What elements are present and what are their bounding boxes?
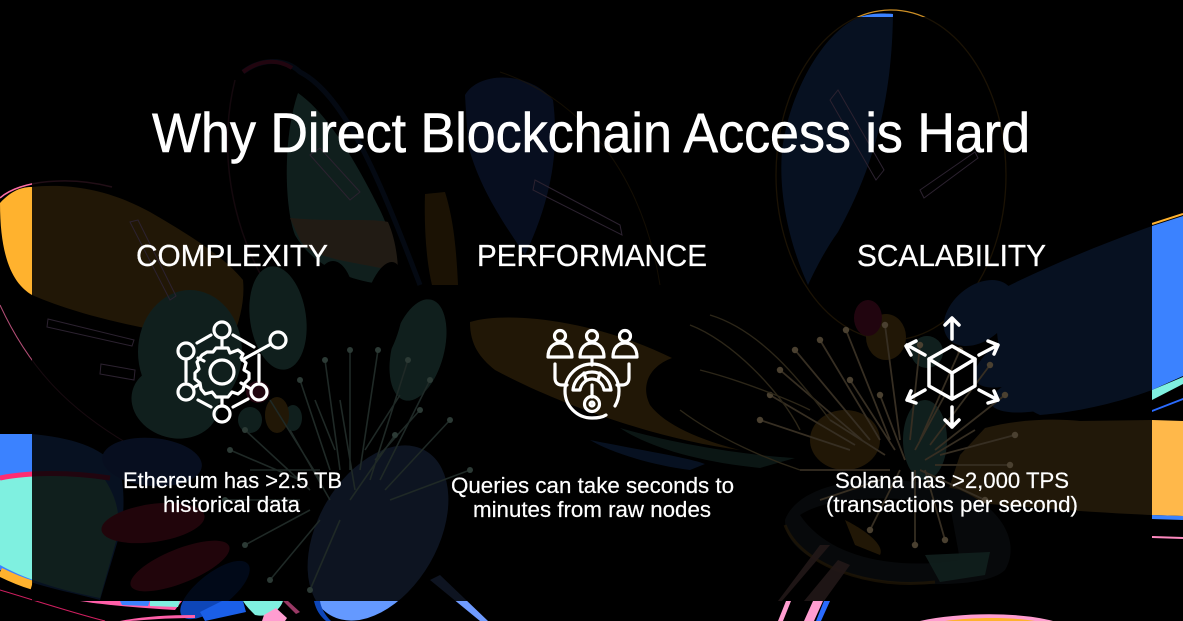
- text: complexity fact: Ethereum has >2.5 TB: [123, 468, 342, 493]
- heading: scalability: SCALABILITY: [857, 238, 1046, 273]
- background: fine flower detail: [47, 90, 1018, 593]
- upper centre navy petal: [465, 78, 555, 255]
- left black petals: [310, 258, 413, 372]
- centre-right petal outlines: [680, 315, 830, 470]
- right teal and blue stripes: [1152, 377, 1183, 400]
- text: performance fact: minutes from raw nodes: [473, 497, 711, 522]
- column: complexity: [123, 238, 342, 517]
- stamen cluster right dots: [757, 322, 1018, 548]
- heading: performance: PERFORMANCE: [477, 238, 707, 273]
- right orange petal: [945, 420, 1183, 516]
- lower left navy and maroon discs: [99, 434, 259, 621]
- text: complexity fact: historical data: [163, 492, 301, 517]
- cup stems: [778, 545, 830, 601]
- small upper petal: [425, 192, 458, 285]
- left orange petal: [0, 186, 243, 340]
- text: scalability fact: [826, 468, 1078, 517]
- right blue petal: [996, 216, 1183, 415]
- centre-left small coloured discs: [246, 381, 289, 433]
- text: scalability fact: (transactions per second): [826, 492, 1078, 517]
- icon: users and gauge: [548, 330, 637, 418]
- large top blue petal: [781, 13, 893, 285]
- left petal rim: [0, 181, 112, 198]
- column: performance: [451, 238, 734, 522]
- bottom edge colours: [80, 601, 1053, 621]
- stamen cluster right: [760, 325, 1015, 545]
- centre-left teal petals: [123, 263, 457, 448]
- upper teal petal rim: [243, 62, 420, 285]
- stamen cluster left dots: [222, 347, 473, 593]
- icon: cube with arrows: [906, 318, 998, 427]
- upper teal petal: [287, 93, 398, 285]
- lower centre stem: [430, 575, 488, 621]
- heading: complexity: COMPLEXITY: [136, 238, 328, 273]
- centre right cup: [785, 480, 1011, 584]
- icon: network gear: [178, 322, 286, 422]
- title: Why Direct Blockchain Access is Hard: [152, 101, 1030, 164]
- text: performance fact: Queries can take seconds to: [451, 473, 734, 498]
- stamen cluster left: [225, 350, 470, 590]
- column: scalability: [826, 238, 1078, 517]
- large blue disc lower centre: [279, 421, 477, 621]
- text: complexity fact: [123, 468, 342, 517]
- right blue discs: [931, 267, 1116, 422]
- centre streaks: [620, 428, 795, 468]
- centre yellow petal: [470, 318, 740, 450]
- thin outline rectangles: [47, 90, 978, 380]
- text: performance fact: [451, 473, 734, 522]
- lower left blue and teal petal: [0, 434, 124, 600]
- text: scalability fact: Solana has >2,000 TPS: [835, 468, 1069, 493]
- centre right small discs: [810, 300, 947, 480]
